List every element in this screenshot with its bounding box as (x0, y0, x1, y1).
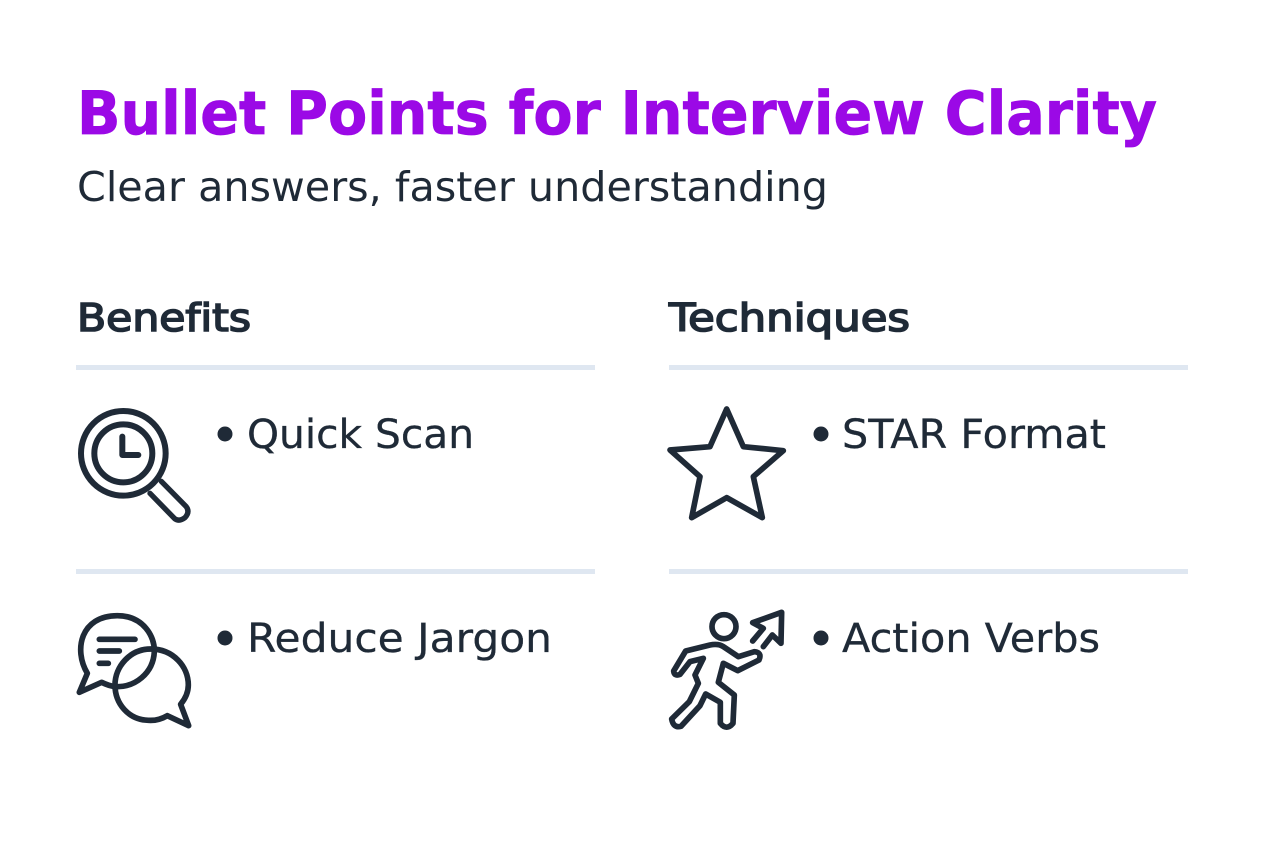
item: quick scan: Quick Scan (247, 412, 474, 458)
panel: benefits (76, 296, 595, 726)
heading: benefits: Benefits (77, 296, 251, 340)
title: Bullet Points for Interview Clarity (77, 79, 1157, 149)
item: action verbs: Action Verbs (842, 616, 1100, 662)
subtitle: Clear answers, faster understanding (77, 163, 828, 211)
icon: magnifier with clock (81, 411, 188, 520)
heading: techniques: Techniques (668, 296, 910, 340)
icon: star (670, 409, 783, 518)
icon: speech bubbles (79, 616, 189, 726)
item: star format: STAR Format (842, 412, 1106, 458)
item: reduce jargon: Reduce Jargon (247, 616, 552, 662)
panel: techniques (668, 296, 1188, 727)
icon: running person with arrow (672, 612, 782, 727)
